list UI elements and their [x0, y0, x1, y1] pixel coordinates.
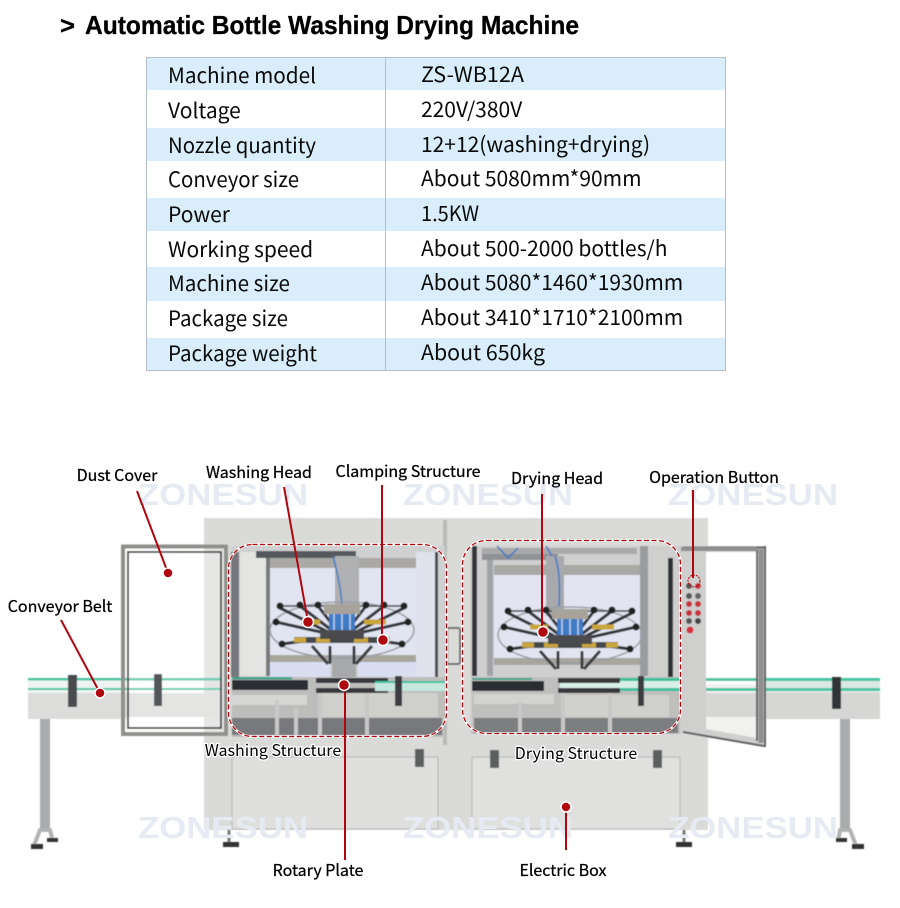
feet — [229, 830, 684, 842]
left conveyor — [28, 675, 208, 849]
right window — [470, 546, 682, 734]
callout: conveyor belt — [8, 593, 112, 698]
specification table: 1.5KW — [421, 198, 479, 228]
top watermarks: ZONESUN — [138, 477, 308, 512]
callout: clamping structure: Clamping Structure — [336, 458, 481, 482]
callout: operation button — [649, 464, 779, 587]
washing structure boundary — [228, 544, 446, 736]
machine body — [204, 518, 708, 830]
top watermarks: ZONESUN — [403, 477, 573, 512]
specification table: About 5080mm*90mm — [421, 163, 642, 193]
right door — [681, 546, 765, 747]
specification table: Conveyor size — [168, 164, 299, 194]
callout: drying head — [511, 465, 603, 638]
specification table: Machine model — [168, 60, 316, 90]
operation buttons — [686, 583, 701, 634]
specification table: Voltage — [168, 95, 241, 125]
callout: rotary plate — [273, 680, 363, 881]
title: Automatic Bottle Washing Drying Machine — [85, 10, 579, 40]
callout: rotary plate: Rotary Plate — [273, 857, 363, 881]
callout: clamping structure — [336, 458, 481, 646]
bottom watermarks — [138, 810, 838, 845]
callout: dust cover: Dust Cover — [77, 462, 158, 486]
callout: washing head: Washing Head — [206, 459, 312, 483]
callout: washing head — [206, 459, 314, 628]
top watermarks — [138, 477, 838, 512]
bottom watermarks: ZONESUN — [668, 810, 838, 845]
left window — [231, 546, 445, 737]
specification table: Power — [168, 199, 231, 229]
specification table: Package size — [168, 303, 288, 333]
label: washing structure: Washing Structure — [205, 737, 341, 761]
callout: electric box: Electric Box — [519, 857, 607, 881]
specification table: Working speed — [168, 234, 313, 264]
callout: drying head: Drying Head — [511, 465, 603, 489]
label: drying structure: Drying Structure — [515, 740, 637, 764]
callout: conveyor belt: Conveyor Belt — [8, 593, 112, 617]
specification table: Machine size — [168, 268, 290, 298]
bottom watermarks: ZONESUN — [138, 810, 308, 845]
drying structure boundary — [462, 540, 680, 734]
specification table: About 500-2000 bottles/h — [421, 233, 668, 263]
title: > — [60, 12, 75, 40]
specification table: About 3410*1710*2100mm — [421, 302, 683, 332]
bottom watermarks: ZONESUN — [403, 810, 573, 845]
callout: electric box — [519, 802, 607, 881]
specification table: About 650kg — [421, 337, 545, 367]
callout: operation button: Operation Button — [649, 464, 779, 488]
specification table: Package weight — [168, 338, 317, 368]
specification table — [146, 57, 726, 371]
specification table: ZS-WB12A — [421, 59, 524, 89]
specification table: 220V/380V — [421, 94, 523, 124]
specification table: 12+12(washing+drying) — [421, 129, 650, 159]
specification table: Nozzle quantity — [168, 130, 316, 160]
left door — [123, 546, 226, 734]
callout: dust cover — [77, 462, 173, 578]
machine illustration — [28, 518, 880, 849]
specification table: About 5080*1460*1930mm — [421, 267, 683, 297]
right conveyor — [700, 675, 880, 849]
top watermarks: ZONESUN — [668, 477, 838, 512]
